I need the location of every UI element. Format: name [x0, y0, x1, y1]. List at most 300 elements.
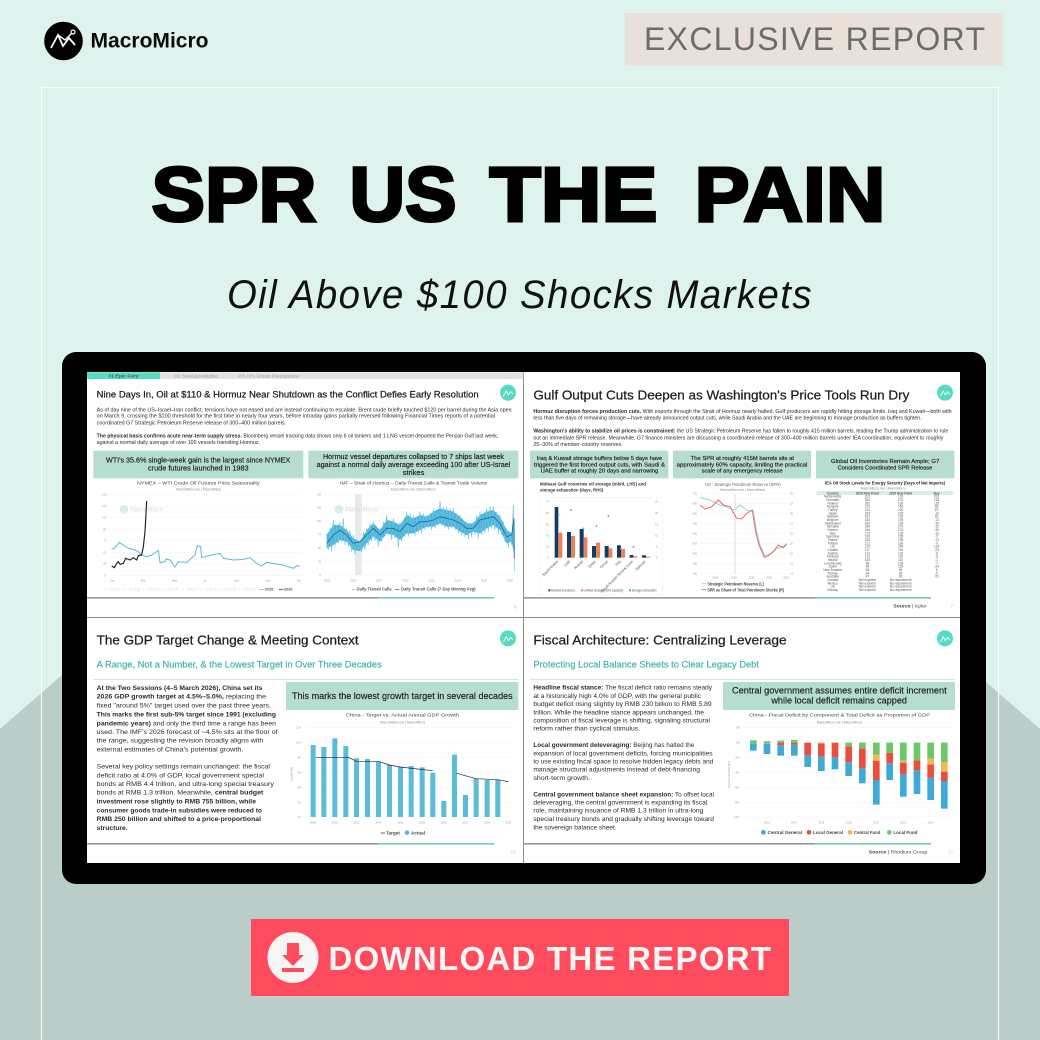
callout: lowest target: [286, 682, 518, 710]
line chart: Hormuz transit calls: 100: [317, 519, 322, 523]
line chart: SPR: [693, 482, 793, 592]
bar chart: Gulf storage: Saudi-Kuwait Neutral Zone: [600, 560, 634, 593]
line chart: SPR: 2023: [766, 575, 772, 579]
bar chart: Gulf storage: 5: [656, 545, 658, 549]
table: IEA oil stock levels: 215: [898, 511, 904, 515]
bar chart: GDP target vs actual: China - Target vs. Actual Annual GDP Growth: [346, 713, 459, 718]
text block: fiscal stance: role, maintaining issuance of RMB 1.3 trillion in ultra-long: [533, 808, 704, 815]
line chart: SPR: 300: [693, 561, 698, 565]
table: IEA oil stock levels: -10: [934, 511, 939, 515]
table: IEA oil stock levels: -30: [934, 528, 939, 532]
text block: two sessions: the range, suggesting the revision broadly aligns with: [97, 738, 264, 745]
heading: The GDP Target Change & Meeting Context: [97, 634, 359, 648]
title: THE: [490, 152, 658, 238]
subtitle: Oil Above $100 Shocks Markets: [227, 273, 813, 317]
table: IEA oil stock levels: 183: [865, 518, 870, 522]
stacked bar chart: fiscal deficit: Central Fund: [854, 830, 881, 835]
text block: intro: on March 9, crossing the $100 threshold for the first time in nearly four years, before intraday gains partially reversed following Financial Times reports of a potential: [97, 414, 495, 420]
bar chart: GDP target vs actual: 2008: [310, 820, 316, 824]
title: PAIN: [694, 152, 886, 238]
bar chart: GDP target vs actual: Target: [386, 830, 401, 835]
bar chart: GDP target vs actual: 2022: [462, 820, 469, 824]
bar chart: Gulf storage: 75: [546, 500, 549, 504]
bar chart: GDP target vs actual: 2%: [297, 800, 302, 804]
table: IEA oil stock levels: 90: [899, 571, 903, 575]
table: IEA oil stock levels: Australia: [827, 575, 839, 579]
subheading: A Range, Not a Number, & the Lowest Target in Over Three Decades: [97, 659, 382, 669]
bar chart: GDP target vs actual: 2016: [397, 820, 404, 824]
table: IEA oil stock levels: Netherlands: [824, 495, 842, 499]
table: IEA oil stock levels: Canada: [827, 578, 838, 582]
panel: slide oil and Hormuz: #2 SeaSpocalypse: [175, 374, 219, 379]
text block: intro: against a normal daily average of over 100 vessels transiting Hormuz.: [97, 440, 260, 446]
line chart: Hormuz transit calls: 2021: [376, 579, 382, 583]
line chart: SPR: 360: [693, 551, 698, 555]
stacked bar chart: fiscal deficit: -6%: [735, 785, 740, 789]
line chart: Hormuz transit calls: Daily Transit Calls: [357, 587, 392, 592]
button: download the report: DOWNLOAD THE REPORT: [328, 940, 771, 977]
bar chart: Gulf storage: 10: [655, 534, 658, 538]
text block: fiscal stance: Local government deleveraging: Beijing has halted the: [533, 742, 695, 749]
bar chart: GDP target vs actual: 2020: [441, 820, 447, 824]
stacked bar chart: fiscal deficit: 2%: [736, 726, 740, 730]
line chart: WTI seasonality: [102, 480, 302, 592]
line chart: WTI seasonality: Jan: [297, 579, 301, 583]
callout: storage buffers: Iraq & Kuwait storage buffers below 5 days have: [537, 456, 662, 462]
callout: Hormuz: [308, 451, 518, 478]
table: IEA oil stock levels: -51: [934, 575, 939, 579]
callout: Hormuz: strikes: [403, 470, 425, 477]
line chart: Hormuz transit calls: 2019: [324, 579, 331, 583]
line chart: Hormuz transit calls: 2025: [481, 579, 487, 583]
table: IEA oil stock levels: 105: [898, 561, 904, 565]
stacked bar chart: fiscal deficit: 2014: [791, 820, 797, 824]
table: IEA oil stock levels: -10: [934, 525, 939, 529]
table: IEA oil stock levels: Slovakia: [827, 525, 839, 529]
bar chart: Gulf storage: Oman: [599, 560, 609, 569]
stacked bar chart: fiscal deficit: 2016: [818, 820, 825, 824]
bar chart: Gulf storage: 60: [546, 511, 549, 515]
bar chart: GDP target vs actual: 2014: [375, 820, 382, 824]
callout: storage buffers: triggered the first forced output cuts, with Saudi &: [534, 462, 665, 468]
panel: slide Gulf output cuts: [523, 385, 954, 609]
table: IEA oil stock levels: Country: [827, 491, 839, 495]
line chart: WTI seasonality: Jul: [203, 579, 207, 583]
table: IEA oil stock levels: -30: [934, 521, 939, 525]
table: IEA oil stock levels: 124: [934, 545, 940, 549]
table: IEA oil stock levels: 98: [866, 561, 869, 565]
tag: exclusive report: EXCLUSIVE REPORT: [644, 21, 985, 57]
table: IEA oil stock levels: France: [828, 538, 838, 542]
line chart: Hormuz transit calls: 75: [318, 533, 321, 537]
bar chart: Gulf storage: 15: [655, 522, 658, 526]
line chart: SPR: Strategic Petroleum Reserve (L): [707, 581, 764, 586]
table: IEA oil stock levels: Net exporter: [859, 578, 876, 582]
line chart: WTI seasonality: NYMEX – WTI Crude Oil Futures Price Seasonality: [137, 480, 260, 485]
line chart: SPR: 600: [693, 512, 698, 516]
table: IEA oil stock levels: No requirement: [890, 581, 912, 585]
tag: exclusive report: [625, 13, 1003, 66]
table: IEA oil stock levels: -12: [934, 518, 939, 522]
table: IEA oil stock levels: -9: [935, 541, 938, 545]
text block: two sessions: external estimates of China's potential growth.: [97, 746, 243, 753]
line chart: Hormuz transit calls: [317, 480, 517, 592]
table: IEA oil stock levels: 87: [935, 508, 939, 512]
table: IEA oil stock levels: -12: [934, 538, 939, 542]
table: IEA oil stock levels: 120: [898, 495, 904, 499]
table: IEA oil stock levels: 187: [865, 515, 870, 519]
table: IEA oil stock levels: Croatia: [828, 548, 838, 552]
line chart: SPR: 20: [790, 541, 793, 545]
text block: intro: Washington's ability to stabilize oil prices is constrained: the US Strategic Petroleum Reserve has fallen to roughly 415 million barrels, leading the Trump administration to rule: [533, 429, 948, 435]
line chart: Hormuz transit calls: IMF – Strait of Hormuz – Daily Transit Calls & Transit Trade Volume: [340, 480, 488, 485]
text block: fiscal stance: the sovereign balance sheet.: [533, 824, 617, 831]
bar chart: Gulf storage: storage exhaustion (days, RHS): [540, 488, 604, 493]
callout: central deficit: [723, 682, 955, 710]
text block: two sessions: consumer goods trade-in subsidies were reduced to: [97, 807, 262, 814]
callout: lowest target: This marks the lowest growth target in several decades: [292, 691, 513, 701]
text block: two sessions: 2026 GDP growth target at 4.5%–5.0%, replacing the: [97, 694, 266, 701]
table: IEA oil stock levels: Net exporter: [859, 585, 876, 589]
line chart: Hormuz transit calls: 2020: [350, 579, 357, 583]
text block: two sessions: investment rose slightly to RMB 755 billion, while: [97, 799, 256, 806]
table: IEA oil stock levels: 130: [898, 501, 904, 505]
text block: two sessions: This marks the first sub-5% target since 1991 (excluding: [97, 711, 276, 718]
line chart: WTI seasonality: 62: [103, 550, 107, 554]
text block: two sessions: [97, 685, 278, 832]
table: IEA oil stock levels: 170: [898, 528, 904, 532]
text block: two sessions: bonds at RMB 1.3 trillion. Meanwhile, central budget: [97, 790, 264, 797]
line chart: SPR: 240: [693, 571, 698, 575]
stacked bar chart: fiscal deficit: China - Fiscal Deficit by Component & Total Deficit as Proportion of GDP: [749, 713, 930, 718]
table: IEA oil stock levels: 282: [865, 501, 870, 505]
table: IEA oil stock levels: 183: [865, 538, 870, 542]
table: IEA oil stock levels: 121: [865, 541, 870, 545]
line chart: WTI seasonality: 50: [103, 562, 107, 566]
text block: two sessions: At the Two Sessions (4–5 March 2026), China set its: [97, 685, 263, 692]
bar chart: Gulf storage: 0: [656, 556, 658, 560]
table: IEA oil stock levels: Poland: [828, 541, 838, 545]
line chart: Hormuz transit calls: 25: [318, 560, 321, 564]
stacked bar chart: fiscal deficit: [727, 713, 953, 835]
table: IEA oil stock levels: 150: [898, 505, 904, 509]
table: IEA oil stock levels: Hungary: [827, 505, 839, 509]
stacked bar chart: fiscal deficit: 2024: [928, 820, 934, 824]
panel: slide Gulf output cuts: Source | Kpler: [893, 603, 927, 608]
table: IEA oil stock levels: 313: [865, 495, 870, 499]
callout: storage buffers: [530, 451, 668, 478]
bar chart: Gulf storage: Unfilled storage (90% capacity): [584, 588, 623, 592]
table: IEA oil stock levels: 313: [934, 495, 940, 499]
line chart: SPR: 16: [790, 561, 793, 565]
table: IEA oil stock levels: -5: [935, 571, 938, 575]
bar chart: GDP target vs actual: Actual: [411, 830, 425, 835]
line chart: SPR: 14: [790, 571, 793, 575]
table: IEA oil stock levels: Belgium: [827, 518, 839, 522]
table: IEA oil stock levels: 303: [865, 498, 870, 502]
line chart: WTI seasonality: MacroMicro.me | MacroMicro: [176, 487, 221, 491]
table: IEA oil stock levels: 94: [866, 571, 869, 575]
callout: WTI: WTI's 35.6% single-week gain is the largest since NYMEX: [106, 458, 291, 465]
text block: fiscal stance: short-term growth.: [533, 775, 590, 782]
table: IEA oil stock levels: -7: [935, 561, 938, 565]
stacked bar chart: fiscal deficit: 2012: [764, 820, 770, 824]
text block: fiscal stance: budget deficit rising slightly by RMB 230 billion to RMB 5.89: [533, 701, 712, 708]
table: IEA oil stock levels: Net exporter: [859, 581, 876, 585]
title: SPR: [152, 152, 316, 238]
text block: two sessions: used. The IMF's 2026 forecast of ~4.5% sits at the floor of: [97, 729, 278, 736]
stacked bar chart: fiscal deficit: 2018: [846, 820, 852, 824]
table: IEA oil stock levels: US: [830, 585, 835, 589]
table: IEA oil stock levels: 120: [898, 515, 904, 519]
table: IEA oil stock levels: Denmark: [826, 498, 839, 502]
line chart: Hormuz transit calls: 2024: [455, 579, 461, 583]
panel: slide fiscal architecture: Source | Rhodium Group: [869, 850, 928, 855]
table: IEA oil stock levels: 130: [898, 541, 904, 545]
bar chart: Gulf storage: 30: [546, 534, 549, 538]
table: IEA oil stock levels: 184: [865, 528, 870, 532]
table: IEA oil stock levels: No requirement: [890, 578, 912, 582]
line chart: WTI seasonality: Jan: [110, 579, 115, 583]
text block: intro: less than five days of remaining storage—have already announced output cuts, while Saudi Arabia and the UAE are beginning to manage production as buffers tighten.: [533, 416, 922, 422]
logo: MacroMicro: MacroMicro: [90, 30, 208, 52]
line chart: Hormuz transit calls: MacroMicro.me | MacroMicro: [391, 487, 436, 491]
line chart: Hormuz transit calls: 125: [317, 506, 322, 510]
line chart: SPR: 2016: [713, 575, 719, 579]
table: IEA oil stock levels: 133: [865, 535, 870, 539]
bar chart: Gulf storage: Kuwait: [573, 560, 584, 570]
text block: intro: 25–30% of member-country reserves.: [533, 442, 623, 448]
callout: SPR capacity: [673, 451, 811, 478]
table: IEA oil stock levels: Austria: [828, 551, 838, 555]
table: IEA oil stock levels: 204: [865, 511, 870, 515]
callout: global inventories: Global Oil Inventories Remain Ample; G7: [831, 459, 939, 465]
panel: slide Gulf output cuts: 7: [951, 604, 954, 609]
line chart: SPR: 720: [693, 492, 698, 496]
bar chart: Gulf storage: 0: [547, 556, 549, 560]
line chart: SPR: 2019: [731, 575, 737, 579]
callout: Hormuz: Hormuz vessel departures collapsed to 7 ships last week: [323, 454, 505, 461]
table: IEA oil stock levels: 8: [936, 568, 938, 572]
table: IEA oil stock levels: -6: [935, 551, 938, 555]
callout: SPR capacity: scale of any emergency release: [702, 469, 783, 475]
table: IEA oil stock levels: 2025 New Point: [889, 491, 913, 495]
stacked bar chart: fiscal deficit: Local Fund: [893, 830, 918, 835]
line chart: Hormuz transit calls: MacroMicro: [345, 507, 378, 514]
text block: intro: The physical basis confirms acute near-term supply stress. Bloomberg vessel tracking data shows only 6 oil tankers and 1 LNG vessel departed the Persian Gulf last week,: [97, 434, 498, 440]
text block: intro: Hormuz disruption forces production cuts. With exports through the Strait of Hormuz nearly halted, Gulf producers are rapidly hitting storage limits. Iraq and Kuwait—both with: [533, 409, 952, 415]
callout: WTI: crude futures launched in 1983: [148, 466, 249, 473]
table: IEA oil stock levels: Turkey: [828, 508, 838, 512]
panel: slide oil and Hormuz: #3 AI's Great Divergence: [239, 374, 300, 379]
stacked bar chart: fiscal deficit: MacroMicro.me | MacroMicro: [817, 721, 862, 725]
bar chart: Gulf storage: Iraq: [614, 560, 622, 567]
table: IEA oil stock levels: 130: [898, 508, 904, 512]
table: IEA oil stock levels: 110: [898, 555, 903, 559]
stacked bar chart: fiscal deficit: -10%: [733, 815, 740, 819]
line chart: SPR: 26: [790, 512, 793, 516]
table: IEA oil stock levels: 213: [865, 505, 870, 509]
table: IEA oil stock levels: 113: [865, 555, 870, 559]
table: IEA oil stock levels: Switzerland: [824, 521, 841, 525]
table: IEA oil stock levels: 63: [935, 505, 939, 509]
bar chart: Gulf storage: Absolute inventories: [551, 588, 575, 592]
bar chart: GDP target vs actual: MacroMicro.me | MacroMicro: [380, 721, 425, 725]
line chart: WTI seasonality: 37: [103, 573, 107, 577]
table: IEA oil stock levels: 2025 New Point: [856, 491, 880, 495]
bar chart: Gulf storage: Storage exhaustion: [632, 588, 657, 592]
callout: central deficit: Central government assumes entire deficit increment: [732, 686, 947, 696]
panel: report preview screen: [62, 352, 986, 884]
table: IEA oil stock levels: 120: [898, 565, 904, 569]
table: IEA oil stock levels: 110: [898, 558, 903, 562]
line chart: WTI seasonality: MacroMicro: [130, 507, 163, 514]
bar chart: GDP target vs actual: 2010: [332, 820, 338, 824]
icon: logo badge: [937, 630, 953, 646]
line chart: WTI seasonality: 75: [103, 539, 107, 543]
line chart: SPR: 28: [790, 502, 793, 506]
stacked bar chart: fiscal deficit: Local General: [813, 830, 843, 835]
callout: storage buffers: UAE buffer at roughly 20 days and narrowing: [541, 469, 658, 475]
line chart: SPR: 22: [790, 532, 793, 536]
line chart: WTI seasonality: 112: [102, 504, 107, 508]
panel: slide oil and Hormuz: 6: [514, 604, 517, 609]
table: IEA oil stock levels: 117: [865, 548, 870, 552]
line chart: SPR: 18: [790, 551, 793, 555]
table: IEA oil stock levels: 170: [898, 525, 904, 529]
table: IEA oil stock levels: 98: [866, 568, 869, 572]
table: IEA oil stock levels: 183: [865, 521, 870, 525]
text block: two sessions: Several key policy settings remain unchanged: the fiscal: [97, 764, 271, 771]
stacked bar chart: fiscal deficit: -8%: [735, 800, 740, 804]
title: [152, 152, 886, 238]
table: IEA oil stock levels: 189: [865, 525, 870, 529]
bar chart: GDP target vs actual: 8%: [297, 755, 302, 759]
stacked bar chart: fiscal deficit: -4%: [735, 770, 740, 774]
table: IEA oil stock levels: New Zealand: [823, 568, 842, 572]
bar chart: GDP target vs actual: 6%: [297, 770, 302, 774]
line chart: WTI seasonality: 87: [103, 527, 107, 531]
callout: SPR capacity: approximately 60% capacity, limiting the practical: [677, 462, 807, 468]
text block: fiscal stance: deleveraging, the central government is expanding its fiscal: [533, 799, 707, 806]
line chart: SPR: 2025: [783, 575, 790, 579]
line chart: SPR: US - Strategic Petroleum Reserve (SPR): [705, 482, 781, 487]
line chart: Hormuz transit calls: 150: [317, 492, 322, 496]
bar chart: GDP target vs actual: Growth (%): [290, 767, 294, 782]
line chart: WTI seasonality: Sep: [234, 579, 240, 583]
table: IEA oil stock levels: Sweden: [827, 515, 839, 519]
heading: Fiscal Architecture: Centralizing Leverage: [533, 634, 787, 648]
panel: slide oil and Hormuz: #1 Epic Fury: [108, 374, 139, 379]
line chart: WTI seasonality: Mar: [141, 579, 146, 583]
table: IEA oil stock levels: IEA Oil Stock Levels for Energy Security (Days of Net Imports): [825, 480, 946, 485]
table: IEA oil stock levels: Türkiye: [827, 571, 838, 575]
table: IEA oil stock levels: UK: [830, 545, 836, 549]
callout: SPR capacity: The SPR at roughly 415M barrels sits at: [691, 456, 794, 462]
callout: central deficit: while local deficit remains capped: [770, 696, 907, 706]
line chart: Hormuz transit calls: 0: [319, 573, 321, 577]
bar chart: Gulf storage: UAE: [563, 559, 572, 568]
table: IEA oil stock levels: 170: [898, 498, 904, 502]
table: IEA oil stock levels: 113: [865, 551, 870, 555]
line chart: SPR: 480: [693, 532, 698, 536]
line chart: Hormuz transit calls: 50: [318, 546, 321, 550]
subheading: Protecting Local Balance Sheets to Clear Legacy Debt: [533, 659, 760, 669]
table: IEA oil stock levels: No requirement: [890, 585, 912, 589]
table: IEA oil stock levels: Net exporter: [859, 588, 876, 592]
table: IEA oil stock levels: Germany: [826, 535, 840, 539]
table: IEA oil stock levels: Buy: [934, 491, 940, 495]
bar chart: GDP target vs actual: [290, 713, 515, 835]
bar chart: GDP target vs actual: 0%: [297, 815, 302, 819]
text block: intro: [97, 407, 512, 446]
table: IEA oil stock levels: -10: [934, 531, 939, 535]
icon: logo badge: [937, 385, 953, 401]
table: IEA oil stock levels: 96: [866, 565, 869, 569]
text block: intro: out an immediate SPR release. Meanwhile, G7 finance ministers are discussing a coordinated release of 300–400 million barrels under IEA coordination, equivalent to roughly: [533, 435, 944, 441]
heading: Nine Days In, Oil at $110 & Hormuz Near Shutdown as the Conflict Defies Early Resolution: [97, 390, 479, 400]
line chart: SPR: MacroMicro.me | MacroMicro: [720, 488, 765, 492]
table: IEA oil stock levels: [817, 480, 953, 592]
bar chart: Gulf storage: 45: [546, 522, 549, 526]
table: IEA oil stock levels: 120: [898, 551, 904, 555]
line chart: WTI seasonality: 2026: [284, 588, 293, 592]
line chart: WTI seasonality: 100: [102, 515, 107, 519]
stacked bar chart: fiscal deficit: 0%: [736, 740, 740, 744]
bar chart: Gulf storage: 25: [655, 500, 658, 504]
table: IEA oil stock levels: 47: [866, 575, 869, 579]
panel: slide fiscal architecture: [523, 630, 955, 855]
table: IEA oil stock levels: 128: [934, 498, 940, 502]
stacked bar chart: fiscal deficit: -2%: [735, 755, 740, 759]
table: IEA oil stock levels: 63: [935, 515, 939, 519]
bar chart: Gulf storage: 15: [546, 545, 549, 549]
table: IEA oil stock levels: 90: [899, 575, 903, 579]
table: IEA oil stock levels: 120: [865, 545, 870, 549]
bar chart: GDP target vs actual: 2026: [505, 820, 512, 824]
button: download the report: [251, 919, 789, 996]
line chart: WTI seasonality: May: [172, 579, 178, 583]
line chart: WTI seasonality: 2025: [265, 588, 274, 592]
bar chart: Gulf storage: Mideast Gulf countries oil storage (mb/d, LHS) and: [540, 482, 646, 487]
icon: download arrow: [268, 932, 318, 983]
table: IEA oil stock levels: MacroMicro.me | MacroMicro: [861, 486, 906, 490]
bar chart: GDP target vs actual: 10%: [296, 740, 302, 744]
line chart: SPR: 540: [693, 522, 698, 526]
table: IEA oil stock levels: -24: [934, 565, 939, 569]
table: IEA oil stock levels: -6: [935, 555, 938, 559]
table: IEA oil stock levels: 135: [898, 535, 904, 539]
table: IEA oil stock levels: -2: [935, 558, 938, 562]
bar chart: GDP target vs actual: 4%: [297, 785, 302, 789]
text block: intro: As of day nine of the US–Israel–Iran conflict, tensions have not eased and are instead continuing to escalate. Brent crude briefly touched $120 per barrel during the Asia open: [97, 407, 512, 413]
line chart: SPR: SPR as Share of Total Petroleum Stocks (R): [707, 587, 784, 592]
table: IEA oil stock levels: -2: [935, 535, 938, 539]
text block: fiscal stance: expansion of local government deficits, forcing municipalities: [533, 750, 713, 757]
stacked bar chart: fiscal deficit: Percent of GDP (%): [727, 761, 731, 788]
text block: fiscal stance: to use existing fiscal space to resolve hidden legacy debts and: [533, 759, 714, 766]
table: IEA oil stock levels: 195: [898, 521, 904, 525]
table: IEA oil stock levels: -23: [934, 548, 939, 552]
table: IEA oil stock levels: 152: [934, 501, 940, 505]
callout: Hormuz: against a normal daily average exceeding 100 after US-Israel: [317, 462, 511, 469]
table: IEA oil stock levels: 90: [899, 568, 903, 572]
text block: fiscal stance: [533, 685, 714, 831]
line chart: SPR: 24: [790, 522, 793, 526]
line chart: Hormuz transit calls: Daily Transit Calls (7-Day Moving Avg): [401, 587, 476, 592]
table: IEA oil stock levels: Finland: [827, 501, 838, 505]
line chart: SPR: 660: [693, 502, 698, 506]
